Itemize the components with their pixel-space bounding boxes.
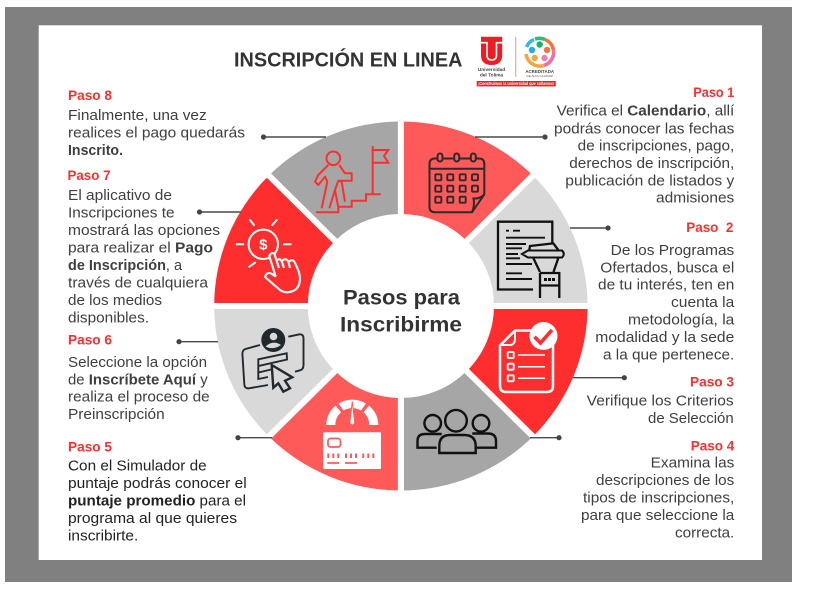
- step 8 text: Inscrito.: [68, 143, 123, 159]
- step 4 text: descripciones de los: [596, 473, 734, 489]
- step 7 text: través de cualquiera: [68, 276, 209, 292]
- step 8 text: Paso 8: [68, 87, 112, 103]
- connectors: [176, 134, 627, 440]
- icon: person climbing stairs to flag: [315, 146, 388, 212]
- step 4 text: correcta.: [675, 526, 734, 542]
- step 5 text: inscribirte.: [68, 529, 138, 545]
- step 4 text: [581, 437, 735, 542]
- step 4 text: tipos de inscripciones,: [583, 491, 734, 507]
- logo: Universidad del Tolima: Universidad: [478, 67, 505, 73]
- logo: Universidad del Tolima: ACREDITADA: [525, 69, 555, 74]
- step 7 text: El aplicativo de: [68, 188, 172, 204]
- step 8 text: realices el pago quedarás: [68, 126, 245, 142]
- step 6 text: realiza el proceso de: [68, 390, 210, 406]
- step 5 text: puntaje podrás conocer el: [68, 476, 247, 492]
- step 5 text: Paso 5: [68, 439, 112, 455]
- step 1 text: publicación de listados y: [565, 173, 735, 189]
- step 1 text: derechos de inscripción,: [569, 156, 734, 172]
- step 7 text: para realizar el Pago: [68, 241, 213, 257]
- step 2 text: Ofertados, busca el: [600, 260, 734, 276]
- step 2 text: a la que pertenece.: [603, 347, 734, 363]
- centre label: Inscribirme: [340, 314, 462, 336]
- step 1 text: Paso 1: [693, 84, 734, 100]
- step 1 text: Verifica el Calendario , allí: [557, 104, 734, 120]
- step 2 text: modalidad y la sede: [595, 330, 734, 346]
- step 2 text: metodología, la: [628, 313, 735, 329]
- step 7 text: de Inscripción, a: [68, 258, 183, 274]
- centre label: Pasos para: [343, 286, 460, 310]
- step 2 text: cuenta la: [671, 295, 735, 311]
- step 6 text: Preinscripción: [68, 407, 165, 423]
- step 3 text: de Selección: [648, 411, 734, 427]
- icon: document and hand with pen: [498, 222, 564, 298]
- icon: group of people: [418, 410, 496, 453]
- step 6 text: Paso 6: [68, 331, 112, 347]
- icon: checklist: [500, 322, 558, 392]
- step 3 text: Paso 3: [690, 374, 734, 390]
- step 2 text: de tu interés, ten en: [598, 278, 734, 294]
- step 7 text: [68, 167, 220, 326]
- step 4 text: Paso 4: [691, 437, 735, 453]
- step 7 text: mostrará las opciones: [68, 223, 220, 239]
- icon: score gauge and card: [323, 400, 381, 469]
- white sheet: [39, 25, 762, 560]
- centre label: [340, 286, 462, 336]
- icon: profile form with cursor: [242, 328, 304, 392]
- step 2 text: Paso 2: [686, 219, 734, 235]
- step 7 text: Inscripciones te: [68, 206, 174, 222]
- icon: payment click hand: $: [259, 237, 268, 254]
- step 6 text: Seleccione la opción: [68, 355, 207, 371]
- step 8 text: [68, 87, 245, 159]
- step 5 text: puntaje promedio para el: [68, 494, 246, 510]
- step 1 text: de inscripciones, pago,: [578, 139, 734, 155]
- title: INSCRIPCIÓN EN LINEA: [234, 48, 462, 72]
- step 8 text: Finalmente, una vez: [68, 108, 207, 124]
- step 7 text: disponibles.: [68, 310, 149, 326]
- step 1 text: admisiones: [656, 191, 734, 207]
- step 5 text: Con el Simulador de: [68, 459, 207, 475]
- icon: payment click hand: [237, 220, 300, 292]
- step 7 text: de los medios: [68, 293, 162, 309]
- step 2 text: [595, 219, 735, 363]
- logo: Universidad del Tolima: del Tolima: [480, 72, 504, 78]
- donut chart of eight steps: [176, 83, 626, 529]
- step 4 text: Examina las: [651, 456, 734, 472]
- logo: Universidad del Tolima: DE ALTA CALIDAD: [527, 74, 554, 78]
- step 2 text: De los Programas: [611, 243, 734, 259]
- step 6 text: [68, 331, 210, 423]
- icon: calendar: [430, 154, 484, 212]
- step 3 text: [587, 374, 734, 427]
- step 1 text: podrás conocer las fechas: [554, 121, 734, 137]
- step 5 text: [68, 439, 247, 545]
- step 4 text: para que seleccione la: [581, 508, 735, 524]
- logo: Universidad del Tolima: ¡Construimos la universidad que soñamos!: [478, 81, 554, 86]
- step 3 text: Verifique los Criterios: [587, 394, 734, 410]
- step 1 text: [554, 84, 735, 207]
- step 7 text: Paso 7: [68, 167, 111, 183]
- logo: Universidad del Tolima: [477, 37, 556, 86]
- step 5 text: programa al que quieres: [68, 511, 237, 527]
- step 6 text: de Inscríbete Aquí y: [68, 372, 208, 388]
